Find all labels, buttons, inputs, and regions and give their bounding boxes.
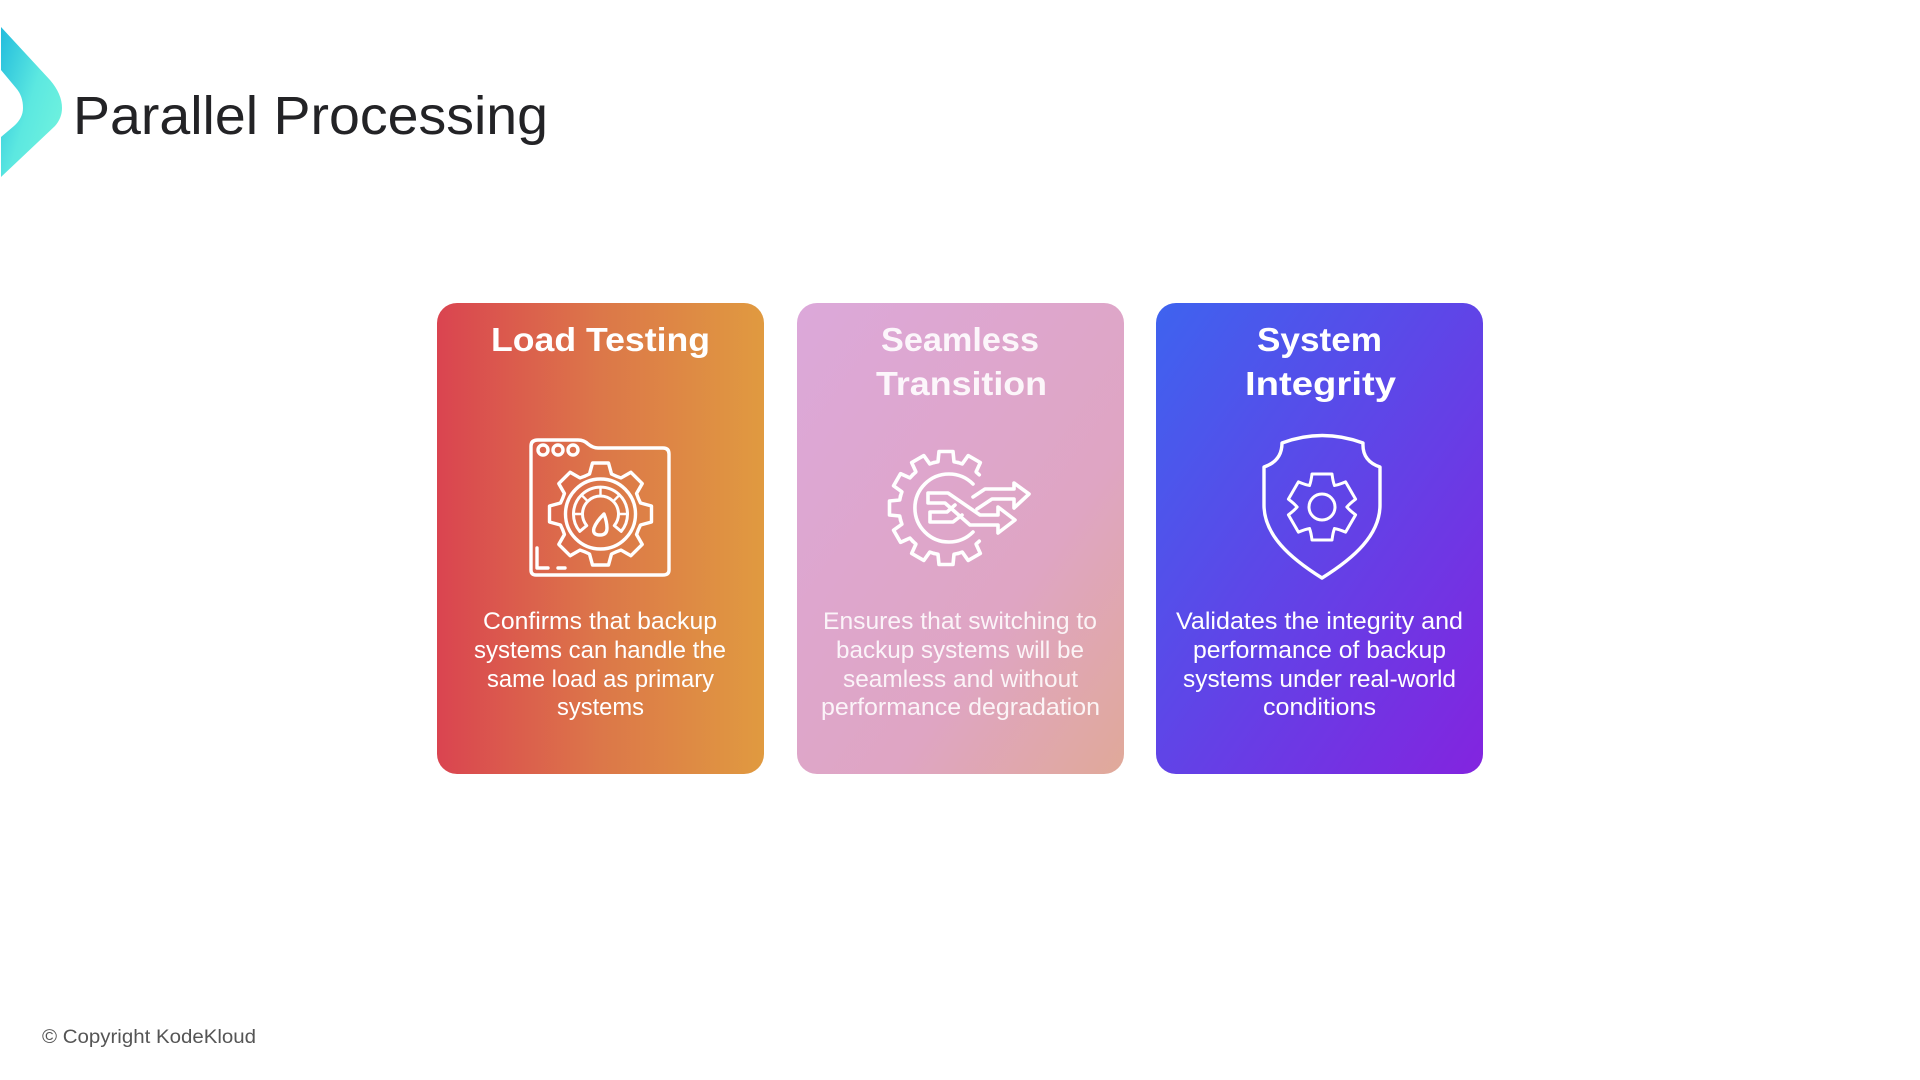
card background: seamless transition (797, 303, 1124, 774)
description: system integrity: conditions (1263, 694, 1376, 721)
card background: system integrity (1156, 303, 1483, 774)
description: seamless transition: seamless and without (843, 666, 1078, 693)
panel: load testing (437, 303, 764, 774)
description: seamless transition (821, 608, 1100, 721)
logo chevron (1, 27, 62, 177)
description: load testing: same load as primary (487, 666, 714, 693)
description: load testing: Confirms that backup (483, 608, 717, 635)
description: load testing: systems can handle the (474, 637, 726, 664)
heading: load testing: Load Testing (491, 321, 710, 358)
description: system integrity: Validates the integrity and (1176, 608, 1463, 635)
description: system integrity: systems under real-world (1183, 666, 1456, 693)
description: seamless transition: performance degradation (821, 694, 1100, 721)
heading: seamless transition: Transition (876, 365, 1047, 402)
panel: seamless transition (797, 303, 1124, 774)
heading: system integrity: Integrity (1245, 365, 1397, 402)
description: load testing: systems (557, 694, 644, 721)
description: load testing (474, 608, 726, 721)
icon: gauge gear window (531, 440, 669, 575)
description: system integrity (1176, 608, 1463, 721)
description: seamless transition: backup systems will be (836, 637, 1084, 664)
title: Parallel Processing (73, 86, 548, 146)
description: system integrity: performance of backup (1193, 637, 1446, 664)
heading: seamless transition (876, 321, 1047, 402)
heading: seamless transition: Seamless (881, 321, 1039, 358)
panel: system integrity (1156, 303, 1483, 774)
footer copyright: © Copyright KodeKloud (42, 1027, 256, 1048)
icon: gear with crossing arrows (890, 452, 1029, 564)
heading: system integrity: System (1257, 321, 1382, 358)
heading: system integrity (1245, 321, 1397, 402)
description: seamless transition: Ensures that switching to (823, 608, 1097, 635)
card background: load testing (437, 303, 764, 774)
icon: shield with gear (1264, 436, 1380, 578)
